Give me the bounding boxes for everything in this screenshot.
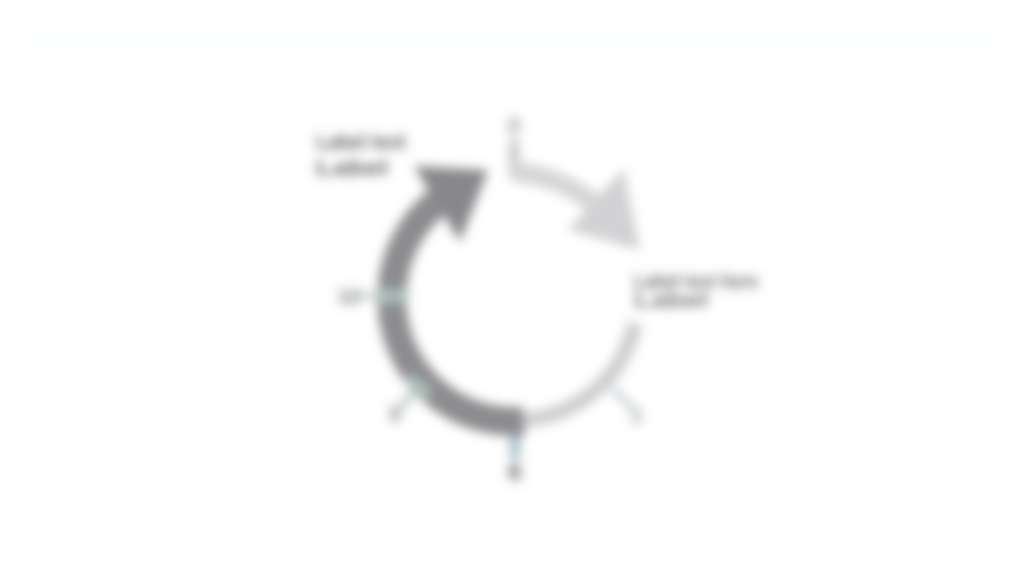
text block: upper-left label: Label text — [316, 131, 406, 154]
tick: bottom — [510, 425, 520, 458]
arrow: dark progress arc — [377, 166, 524, 421]
tick: top — [509, 140, 519, 176]
diagram artwork — [316, 113, 764, 486]
label: bottom tick: 6 — [508, 458, 522, 486]
arrow: light curved segment — [512, 168, 640, 250]
tick: left — [356, 292, 392, 300]
label: lower-right tick: 3 — [630, 404, 642, 429]
arc highlight: left marker — [377, 290, 408, 302]
text block: right label: Label text here — [634, 271, 758, 293]
arrowhead: light — [568, 168, 640, 250]
tick: lower right — [612, 388, 634, 410]
label: left tick: 12 — [338, 286, 360, 308]
arc: light lower-right segment — [522, 323, 635, 420]
faint top band — [20, 22, 1004, 46]
label: lower-left tick: 9 — [389, 402, 401, 427]
arc highlight: lower-left marker — [408, 378, 429, 395]
arrowhead: dark — [414, 166, 488, 242]
text block: upper-left label: Label — [316, 157, 388, 180]
label: top tick: 0 — [507, 113, 521, 140]
tick: lower left — [400, 384, 420, 408]
text block: right label: Label — [634, 290, 708, 312]
